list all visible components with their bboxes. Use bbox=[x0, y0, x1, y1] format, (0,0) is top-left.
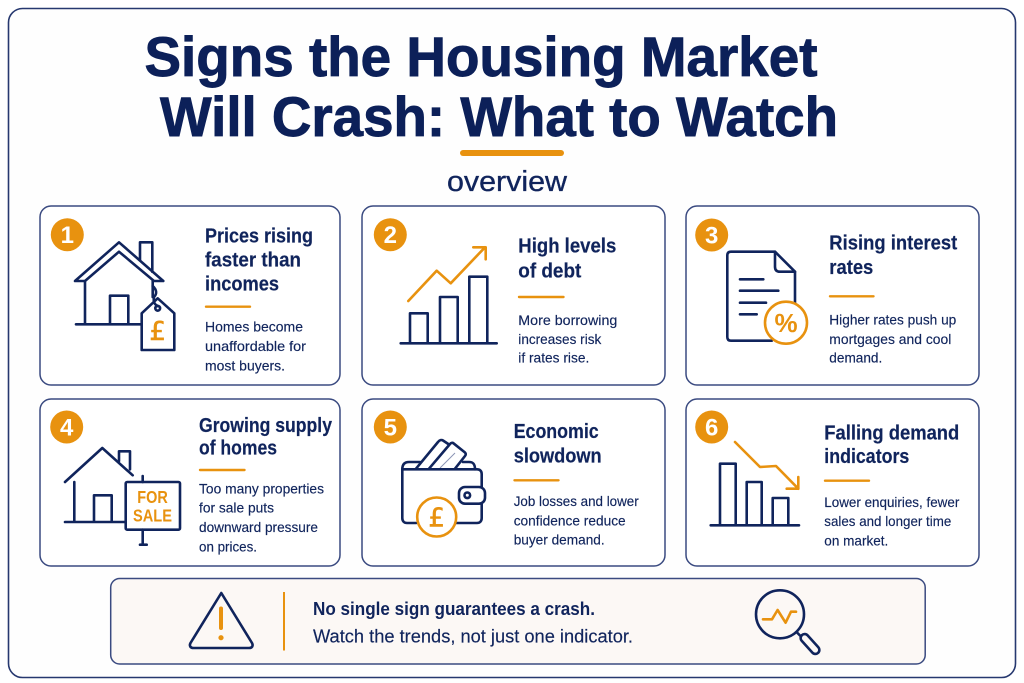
callout divider bbox=[283, 592, 285, 650]
icon: document with percent bbox=[727, 252, 807, 344]
card 1 heading bbox=[205, 226, 313, 296]
card 3 body: Higher rates push up bbox=[829, 311, 957, 327]
badge 3: 3 bbox=[705, 222, 718, 249]
callout text: Watch the trends, not just one indicator. bbox=[313, 626, 633, 646]
card 6 rule bbox=[825, 480, 869, 482]
subtitle: overview: overview bbox=[447, 166, 568, 198]
card 1 body: most buyers. bbox=[205, 358, 285, 374]
card 5 heading: Economic bbox=[514, 421, 599, 443]
icon: magnifying glass with trend bbox=[756, 590, 821, 656]
icon: warning triangle bbox=[190, 593, 253, 648]
panel: card 2 high debt bbox=[362, 206, 665, 385]
card 5 heading: slowdown bbox=[514, 446, 602, 468]
card 4 body: Too many properties bbox=[199, 481, 324, 497]
card 6 heading bbox=[824, 423, 959, 468]
card 5 rule bbox=[514, 479, 558, 481]
card 4 heading: of homes bbox=[199, 438, 277, 460]
title: Signs the Housing Market bbox=[144, 25, 818, 88]
badge 5 bbox=[374, 410, 407, 444]
card 2 heading: of debt bbox=[518, 260, 582, 282]
badge 4: 4 bbox=[60, 414, 74, 441]
badge 1 bbox=[51, 218, 84, 251]
card 1 rule bbox=[206, 306, 250, 308]
card 2 heading: High levels bbox=[518, 236, 616, 258]
card 6 body: on market. bbox=[824, 532, 888, 548]
icon: house with for sale sign bbox=[65, 448, 180, 545]
card 6 heading: Falling demand bbox=[824, 423, 959, 445]
icon: house with price tag bbox=[75, 242, 174, 350]
card 1 body: unaffordable for bbox=[205, 338, 306, 354]
badge 6 bbox=[695, 410, 728, 444]
badge 2: 2 bbox=[384, 222, 397, 249]
panel: card 6 falling demand bbox=[686, 399, 979, 566]
title underline bbox=[460, 150, 564, 156]
card 6 body bbox=[824, 494, 960, 548]
card 6 heading: indicators bbox=[824, 446, 909, 468]
card 3 body bbox=[829, 311, 957, 366]
card 4 rule bbox=[200, 469, 244, 471]
icon: falling bar chart bbox=[711, 442, 799, 525]
panel: card 4 growing supply bbox=[40, 399, 340, 566]
card 3 body: demand. bbox=[829, 350, 882, 366]
icon: wallet with pound coin: £ bbox=[428, 504, 445, 534]
title bbox=[144, 25, 838, 148]
badge 1: 1 bbox=[61, 222, 74, 249]
card 1 heading: faster than bbox=[205, 250, 301, 272]
card 5 heading bbox=[514, 421, 602, 468]
badge 5: 5 bbox=[384, 414, 397, 441]
card 4 body: for sale puts bbox=[199, 500, 274, 516]
icon: wallet with pound coin bbox=[402, 440, 485, 536]
card 4 heading: Growing supply bbox=[199, 415, 333, 437]
badge 6: 6 bbox=[705, 414, 718, 441]
card 3 heading: rates bbox=[829, 257, 873, 279]
title: Will Crash: What to Watch bbox=[160, 85, 838, 148]
badge 4 bbox=[50, 410, 83, 444]
card 3 heading bbox=[829, 232, 958, 279]
card 3 rule bbox=[830, 295, 874, 297]
card 5 body: confidence reduce bbox=[514, 512, 626, 528]
card 2 rule bbox=[519, 296, 564, 298]
card 3 heading: Rising interest bbox=[829, 232, 958, 254]
card 4 body: downward pressure bbox=[199, 519, 318, 535]
card 1 heading: Prices rising bbox=[205, 226, 313, 248]
card 2 heading bbox=[518, 236, 616, 282]
card 6 body: sales and longer time bbox=[824, 513, 952, 529]
card 1 heading: incomes bbox=[205, 274, 279, 296]
icon: document with percent: % bbox=[774, 308, 798, 338]
callout text bbox=[313, 599, 633, 646]
card 1 body bbox=[205, 319, 306, 374]
card 5 body bbox=[514, 493, 639, 547]
panel: bottom callout bbox=[111, 578, 925, 664]
icon: house with for sale sign: FOR bbox=[137, 487, 168, 507]
card 5 body: buyer demand. bbox=[514, 531, 605, 547]
card 2 body: if rates rise. bbox=[518, 350, 589, 366]
icon: house with for sale sign: SALE bbox=[133, 505, 172, 525]
badge 2 bbox=[374, 218, 407, 251]
card 2 body: increases risk bbox=[518, 331, 602, 347]
card 4 body bbox=[199, 481, 324, 554]
card 1 body: Homes become bbox=[205, 319, 303, 335]
panel: card 5 economic slowdown bbox=[362, 399, 665, 566]
badge 3 bbox=[695, 218, 728, 252]
panel: card 3 interest rates bbox=[686, 206, 979, 385]
panel: card 1 prices rising bbox=[40, 206, 340, 385]
card 5 body: Job losses and lower bbox=[514, 493, 639, 509]
card 4 body: on prices. bbox=[199, 538, 257, 554]
card 4 heading bbox=[199, 415, 333, 460]
icon: rising bar chart bbox=[401, 247, 497, 343]
card 3 body: mortgages and cool bbox=[829, 331, 951, 347]
icon: house with price tag: £ bbox=[149, 317, 166, 347]
card 6 body: Lower enquiries, fewer bbox=[824, 494, 960, 510]
card 2 body bbox=[518, 312, 617, 366]
card 2 body: More borrowing bbox=[518, 312, 617, 328]
callout text: No single sign guarantees a crash. bbox=[313, 599, 595, 619]
